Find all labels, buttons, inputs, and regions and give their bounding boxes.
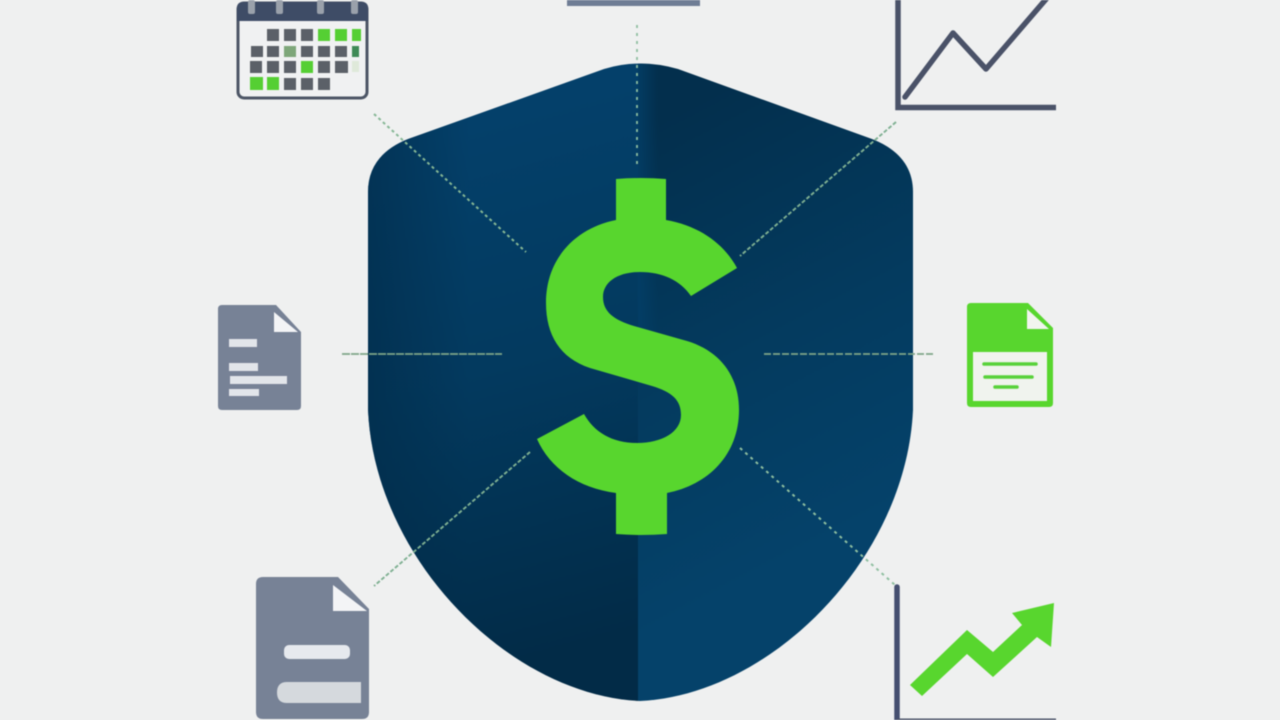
- dotted connector: bottom right: [740, 448, 895, 585]
- dotted connector: top left: [374, 114, 526, 252]
- dotted connector: top: [636, 25, 638, 165]
- icon: dollar sign: [537, 178, 739, 535]
- calendar gray day cells: [250, 29, 348, 90]
- dotted connector: top right: [740, 122, 896, 256]
- dotted connector: bottom left: [374, 452, 530, 586]
- icon: bottom right growth chart: [897, 587, 1056, 720]
- icon: right green document: [967, 303, 1053, 407]
- icon: top document (cropped): [567, 0, 700, 6]
- icon: calendar: [237, 0, 368, 98]
- dotted connector: right: [764, 353, 935, 355]
- calendar green day cells: [250, 29, 361, 90]
- icon: left document: [218, 305, 301, 410]
- dotted connector: left: [342, 353, 502, 355]
- icon: bottom left document: [256, 577, 369, 719]
- icon: top right line chart: [898, 0, 1056, 108]
- shield: [360, 55, 918, 710]
- calendar rings: [248, 0, 358, 14]
